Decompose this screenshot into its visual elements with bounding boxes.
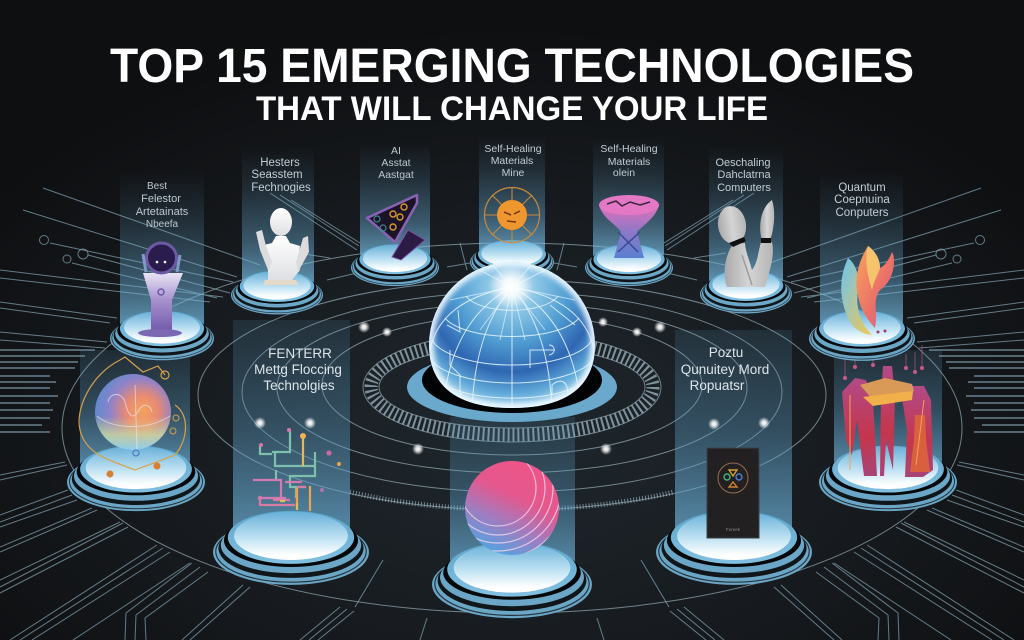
icon: white humanoid [256, 208, 309, 285]
icon: tilted purple device [367, 195, 425, 260]
label: Computers [717, 182, 771, 194]
beam [593, 138, 664, 258]
platform [700, 270, 792, 313]
panel: wide-front right figures [819, 345, 957, 511]
icon: orange sun wheel [484, 187, 540, 243]
beam [450, 417, 575, 567]
panel: colorful flame [809, 172, 915, 361]
label: Materials [491, 155, 533, 167]
title [110, 40, 914, 128]
beam [233, 320, 350, 535]
platform [351, 244, 439, 286]
beam [360, 142, 430, 258]
label: Ropuatsr [690, 378, 745, 393]
platform [470, 240, 554, 280]
label: Aastgat [378, 169, 414, 181]
glowing nodes [254, 317, 770, 455]
panel: white humanoid [231, 146, 323, 314]
panel: AI assistant triangle [351, 142, 439, 286]
panel: wide-front left globe [67, 345, 205, 511]
platform [110, 311, 214, 360]
icon: glass globe dome [429, 262, 595, 410]
beam [820, 172, 903, 327]
title: TOP 15 EMERGING TECHNOLOGIES [110, 40, 914, 93]
panel: robot assistant [110, 170, 214, 360]
platform [432, 542, 592, 618]
beam [80, 350, 190, 467]
platform [231, 271, 323, 314]
beam [120, 170, 204, 327]
panel: central dome [407, 262, 617, 422]
label: Best [147, 181, 167, 192]
icon: robot on podium [138, 243, 183, 337]
label: Coepnuina [834, 194, 890, 206]
beam [242, 146, 314, 285]
icon: gray bowling-pin hands [715, 200, 774, 287]
label: Mettg Floccing [254, 362, 342, 377]
platform [213, 511, 369, 585]
icon: gradient orb with gold orbit [79, 345, 186, 478]
label: Nbeefa [146, 219, 179, 230]
label: Self-Healing [600, 143, 658, 155]
label: Qunuitey Mord [681, 362, 769, 377]
platform [656, 511, 812, 585]
label: AI [391, 145, 401, 157]
orbit rings [62, 243, 962, 613]
icon: dark phone [707, 448, 759, 538]
beam [834, 350, 942, 467]
label: Quantum [838, 182, 886, 194]
label: Dahclatrna [717, 169, 771, 181]
panel: circuit board technologies [213, 320, 369, 585]
label: FENTERR [268, 346, 332, 361]
label: Self-Healing [484, 143, 542, 155]
platform [67, 446, 205, 511]
beam [479, 134, 545, 253]
platform [809, 311, 915, 361]
label: Materials [608, 156, 650, 168]
label: Seasstem [251, 169, 303, 181]
platform [585, 244, 673, 286]
panel: phone quantum [656, 330, 812, 585]
icon: pink funnel sculpture [599, 195, 659, 258]
label: Conputers [835, 207, 889, 219]
icon: dark phone: Foreek [726, 527, 741, 532]
icon: red robed figures [842, 345, 933, 477]
panel: sun material [470, 134, 554, 280]
icon: ribbon flame [841, 246, 894, 335]
icon: circuit traces [253, 428, 341, 511]
label: Asstat [381, 157, 411, 169]
beam [675, 330, 792, 535]
dome shadow [422, 347, 602, 413]
label: Hesters [260, 157, 300, 169]
subtitle: THAT WILL CHANGE YOUR LIFE [256, 90, 768, 128]
label: Felestor [141, 193, 181, 205]
label: olein [613, 167, 635, 179]
icon: pink sphere [465, 461, 559, 555]
platform [819, 446, 957, 511]
panel: bottom center pink sphere [427, 417, 592, 618]
label: Mine [502, 167, 525, 179]
beam [709, 146, 783, 284]
label: Fechnogies [251, 182, 311, 194]
panel: pink bowl [585, 138, 673, 286]
label: Artetainats [136, 206, 189, 218]
grid lines: side rays [0, 188, 1024, 640]
label: Technolgies [263, 378, 335, 393]
dome base ring [407, 352, 617, 422]
label: Poztu [709, 345, 743, 360]
panel: gray pins [700, 146, 792, 313]
label: Oeschaling [715, 157, 771, 169]
